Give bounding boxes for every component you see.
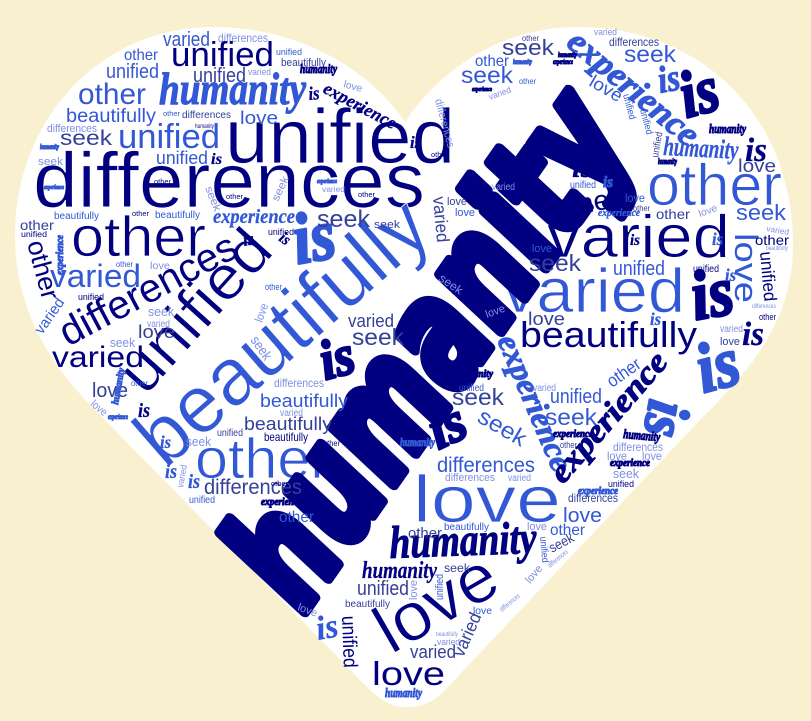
small words group: bottom left: varied (280, 408, 303, 419)
small words group: top right: varied (429, 196, 453, 243)
small words group: bottom right: other (603, 354, 645, 391)
small words group: top left: other (358, 192, 376, 199)
small words group: top left: seek (148, 304, 174, 319)
small words group: bottom right: unified (357, 578, 409, 600)
small words group: bottom left: love (92, 380, 128, 402)
small words group: top right: other (519, 77, 536, 86)
small words group: top left: beautifully (66, 106, 157, 127)
small words group: bottom right: varied (448, 609, 485, 660)
small words group: top right: love (528, 309, 565, 329)
small words group: top right: humanity (658, 157, 677, 166)
small words group: top left: unified (118, 118, 220, 156)
word: humanity (dark script): humanity (389, 512, 538, 568)
small words group: bottom right: love (473, 606, 492, 617)
small words group: top right: seek (529, 250, 582, 276)
word: love (royal): love (413, 462, 561, 536)
small words group: bottom left (88, 367, 361, 668)
small words group: top left: other (132, 211, 150, 218)
small words group: bottom right: humanity (623, 426, 661, 444)
small words group: top left: varied (322, 185, 345, 194)
small words group: bottom right (345, 354, 663, 700)
small words group: top left: unified (106, 61, 159, 83)
word: beautifully (right): beautifully (520, 314, 697, 355)
small words group: top right: love (532, 243, 552, 255)
small words group: bottom right: unified (550, 386, 602, 408)
small words group: bottom right: beautifully (345, 599, 390, 610)
small words group: top left: experience (320, 78, 400, 133)
small words group: top right: love (625, 191, 645, 205)
small words group: bottom left: beautifully (244, 414, 332, 434)
small words group: top left: humanity (40, 143, 60, 151)
small words group: top left: differences (182, 110, 231, 121)
small words group: top left: unified (21, 230, 47, 239)
small words group: top left: differences (218, 31, 268, 45)
small words group: top left: seek (317, 206, 371, 233)
small words group: top right: experience (553, 58, 573, 66)
small words group: top right: unified (500, 269, 526, 280)
small words group: bottom right: seek (613, 466, 639, 481)
small words group: bottom left: seek (186, 434, 211, 449)
small words group: bottom right: beautifully (444, 522, 489, 533)
small words group: top left: seek (60, 127, 113, 150)
word: other (lower centre): other (195, 427, 330, 491)
small words group: bottom right: experience (578, 486, 618, 497)
small words group: top right: unified (693, 264, 719, 275)
small words group: top left: love (342, 79, 364, 95)
small words group: top right: unified (650, 131, 665, 159)
small words group: top right: experience (472, 87, 492, 93)
small words group: bottom right: love (642, 449, 662, 463)
small words group: top right: other (759, 312, 776, 322)
word: is (royal sideways): is (631, 396, 702, 443)
small words group: bottom left: differences (204, 476, 302, 499)
small words group: bottom left: is (138, 400, 150, 422)
small words group: top right: seek (502, 35, 555, 60)
small words group: top left: humanity (195, 124, 214, 130)
small words group: top right: seek (624, 41, 677, 67)
small words group: top left: seek (352, 324, 405, 350)
word: humanity (royal script): humanity (159, 63, 306, 114)
small words group: top right: is (745, 132, 767, 169)
small words group: top right: differences (432, 98, 457, 150)
small words group: bottom right: love (563, 505, 602, 527)
small words group: top right: other (633, 204, 650, 213)
small words group: top right (410, 27, 790, 353)
small words group: bottom left: unified (189, 495, 215, 506)
small words group: bottom right: varied (437, 637, 460, 647)
word: varied (dark): varied (547, 203, 730, 270)
small words group: top left: varied (348, 311, 394, 331)
small words group: bottom left: love (296, 602, 319, 620)
small words group: top left: seek (270, 174, 292, 203)
word: is (dark centre): is (417, 390, 476, 462)
small words group: bottom left: varied (175, 464, 189, 488)
small words group: top left: unified (171, 36, 274, 74)
small words group: top right: other (522, 34, 539, 43)
small words group: top right: other (656, 206, 690, 222)
word: other (right): other (647, 153, 782, 218)
small words group: bottom left: other (323, 439, 340, 448)
small words group: top left: unified (276, 47, 302, 57)
small words group: top right: love (447, 196, 467, 208)
small words group: top right: love (728, 233, 764, 303)
small words group: top left: other (154, 179, 172, 186)
small words group: bottom left: differences (274, 376, 324, 390)
small words group: bottom right: varied (508, 473, 531, 484)
small words group: top left: seek (374, 219, 401, 231)
small words group: bottom left: unified (217, 428, 243, 439)
small words group: top left: unified (268, 227, 294, 237)
small words group: top right: love (484, 303, 507, 321)
small words group: top right: is (410, 133, 421, 152)
small words group: top right: other (755, 232, 789, 248)
word: is (dark near beautifully): is (312, 324, 361, 393)
small words group: bottom right: seek (444, 561, 471, 575)
small words group: top left: experience (55, 235, 66, 275)
small words group: bottom right: experience (553, 429, 593, 440)
small words group: top right: unified (756, 251, 780, 302)
small words group: top right: is (725, 265, 736, 285)
small words group: top right: is (654, 57, 683, 102)
small words group: bottom left: experience (108, 413, 128, 421)
small words group: top left: love (150, 261, 170, 272)
small words group: bottom right: seek (545, 404, 598, 430)
small words group: top left: experience (317, 179, 337, 185)
small words group: bottom left: is (160, 432, 171, 452)
small words group: bottom left: is (313, 608, 341, 648)
small words group: top left: varied (147, 319, 170, 330)
small words group: bottom right: varied (533, 383, 556, 394)
small words group: top left: varied (52, 341, 144, 374)
small words group: top left: unified (156, 148, 208, 168)
small words group: top left: beautifully (54, 211, 99, 222)
word: differences (large): differences (33, 136, 425, 224)
small words group: top left: is (241, 228, 256, 250)
small words group: top right: differences (752, 304, 776, 310)
small words group: top right: humanity (663, 131, 740, 165)
small words group: top left: unified (78, 292, 104, 302)
small words group: top left: love (240, 108, 278, 128)
small words group: bottom right: differences (437, 454, 535, 477)
word: is (dark right): is (684, 253, 739, 336)
word: is (dark top right): is (671, 52, 727, 132)
small words group: top left: varied (50, 258, 141, 294)
small words group: top left: differences (47, 123, 97, 135)
word: experience (royal top): experience (560, 21, 707, 154)
small words group: top left: love (138, 322, 175, 342)
small words group: top left: other (78, 78, 146, 111)
small words group: top right: humanity (513, 58, 533, 66)
word: is (inside main humanity): is (528, 122, 558, 163)
small words group: top right: seek (461, 62, 514, 88)
small words group: top left: love (252, 301, 271, 324)
small words group: bottom right: humanity (400, 435, 435, 449)
small words group: top right: varied (492, 182, 515, 193)
small words group: bottom right: unified (608, 479, 634, 489)
word: beautifully (large diagonal): beautifully (117, 180, 447, 484)
small words group: bottom left: love (88, 398, 110, 419)
small words group: bottom right: seek (452, 384, 505, 410)
small words group: bottom left: other (131, 379, 148, 388)
word: experience (royal centre): experience (491, 329, 580, 476)
small words group: bottom left: is (188, 471, 200, 493)
small words group: bottom right: love (408, 580, 420, 600)
small words group: top right: seek (436, 271, 466, 298)
small words group: top left: seek (110, 335, 135, 350)
small words group: bottom right: love (527, 521, 547, 533)
small words group: top right: is (712, 229, 723, 249)
word: other (left): other (71, 205, 206, 269)
small words group: top right: humanity (558, 51, 578, 59)
small words group: bottom right: differences (568, 491, 618, 505)
word: unified (large): unified (225, 94, 455, 180)
small words group: bottom left: unified (337, 615, 361, 668)
small words group: bottom right: humanity (385, 685, 422, 700)
small words group: top left: seek (202, 185, 223, 214)
small words group: top right: is (603, 174, 613, 191)
small words group: top right: varied (594, 27, 617, 37)
small words group: top left: is (276, 229, 294, 249)
small words group: top right: love (586, 71, 626, 106)
small words group: bottom right: other (560, 440, 577, 450)
small words group: top right: other (552, 182, 621, 224)
small words group: top left: varied (163, 29, 210, 51)
word: is (royal large): is (286, 194, 341, 280)
small words group: top left: other (265, 282, 282, 292)
small words group: top left: other (21, 237, 66, 303)
small words group: bottom left: other (279, 509, 315, 526)
small words group: top left: seek (38, 156, 64, 168)
word: experience (dark diagonal): experience (541, 344, 675, 490)
small words group: top right: unified (637, 108, 654, 136)
small words group: top right: seek (736, 200, 787, 225)
small words group: top right: varied (766, 224, 790, 237)
small words group: bottom right: experience (610, 458, 650, 469)
small words group: bottom right: humanity (456, 369, 494, 380)
small words group: bottom right: unified (459, 383, 484, 394)
small words group: top right: is (572, 148, 593, 185)
small words group: top left: unified (193, 65, 246, 87)
small words group: top right: other (431, 152, 449, 159)
small words group: top right: love (720, 336, 740, 348)
small words group: bottom right: unified (537, 536, 550, 563)
small words group: bottom right: seek (546, 529, 577, 556)
small words group: bottom right: love (607, 449, 627, 463)
small words group: top right: humanity (709, 121, 746, 136)
small words group: bottom left: beautifully (260, 391, 348, 411)
small words group: bottom right: differences (613, 440, 663, 454)
small words group: bottom right: humanity (362, 558, 437, 584)
small words group: top right: love (697, 203, 719, 220)
small words group: top left: beautifully (281, 57, 326, 69)
small words group: top left: seek (248, 333, 276, 364)
small words group: top left: beautifully (155, 210, 200, 221)
small words group: top right: varied (487, 85, 512, 102)
small words group: top left: humanity (300, 61, 337, 76)
word: love (diagonal dark): love (360, 537, 511, 668)
small words group: top left: varied (248, 67, 271, 77)
small words group: top right: experience (598, 208, 641, 219)
small words group: bottom left: experience (261, 497, 303, 508)
small words group: top right: love (738, 156, 776, 176)
small words group: top right: is (650, 309, 661, 329)
small words group: bottom right: varied (410, 642, 456, 662)
small words group: top left: is (211, 151, 222, 168)
small words group: top left: other (163, 111, 181, 118)
small words group: bottom left: other (271, 481, 289, 488)
small words group: top left: other (226, 194, 244, 201)
word: varied (royal): varied (503, 257, 685, 326)
small words group: top left (20, 29, 405, 374)
small words group: top right: unified (613, 258, 665, 280)
small words group: top left: other (116, 260, 133, 269)
small words group: bottom right: other (408, 525, 442, 542)
small words group: bottom right: unified (434, 574, 446, 600)
small words group: top left: is (308, 83, 320, 105)
small words group: top right: unified (570, 180, 596, 191)
small words group: bottom left: beautifully (264, 430, 308, 444)
small words group: bottom left: is (165, 461, 177, 483)
small words group: top right: unified (620, 93, 637, 121)
small words group: bottom right: other (550, 522, 586, 539)
word: is (royal right): is (687, 323, 748, 408)
small words group: bottom left: humanity (110, 367, 127, 406)
small words group: top right: love (455, 207, 475, 219)
small words group: bottom right: love (372, 655, 445, 692)
small words group: bottom right: seek (474, 403, 532, 452)
small words group: top right: beautifully (766, 246, 788, 252)
small words group: bottom right: differences (445, 472, 495, 484)
small words group: bottom right: differences (547, 549, 570, 570)
small words group: bottom right: love (523, 563, 545, 586)
small words group: top left: experience (213, 206, 295, 228)
small words group: top right: varied (720, 324, 743, 335)
word: differences (diagonal): differences (52, 225, 244, 355)
small words group: top left: experience (44, 185, 64, 191)
small words group: top right: is (630, 232, 640, 249)
small words group: top right: is (742, 316, 764, 353)
small words group: top right: other (475, 53, 510, 70)
small words group: bottom right: differences (499, 593, 522, 614)
small words group: top left: other (20, 217, 54, 233)
small words group: top left: varied (31, 295, 68, 337)
small words group: top left: other (124, 47, 159, 64)
small words group: top right: differences (609, 35, 659, 49)
word: unified (diagonal): unified (104, 215, 286, 406)
small words group: bottom right: beautifully (436, 632, 458, 638)
